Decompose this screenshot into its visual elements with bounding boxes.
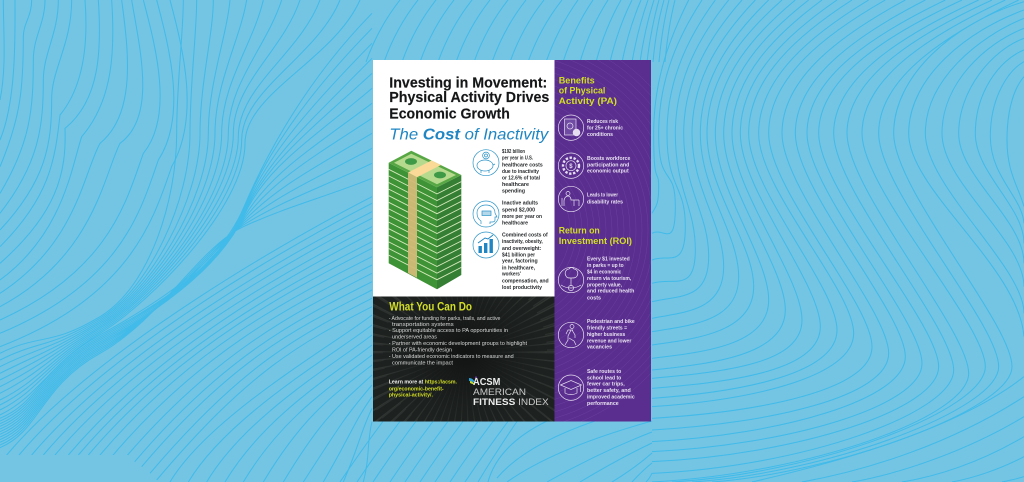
stat: healthcare cost bbox=[473, 149, 543, 195]
text: inactive adults bbox=[502, 201, 543, 226]
logo: ACSM American Fitness Index: AMERICAN bbox=[473, 387, 526, 398]
heading: return on investment bbox=[559, 225, 632, 247]
action list: transportation systems bbox=[392, 322, 454, 328]
heading: benefits of physical activity: Benefits bbox=[559, 75, 595, 86]
text: parks: $4 in economic bbox=[587, 269, 621, 275]
text: safe routes: improved academic bbox=[587, 395, 635, 401]
roi: safe routes bbox=[558, 369, 635, 407]
title: Investing in Movement: bbox=[389, 75, 547, 91]
icon: pedestrian bbox=[558, 322, 584, 348]
learn more link bbox=[389, 379, 457, 399]
text: streets bbox=[587, 319, 635, 351]
icon: medical report bbox=[558, 115, 584, 140]
heading: benefits of physical activity bbox=[559, 75, 617, 107]
icon: person at desk bbox=[558, 186, 584, 212]
text: safe routes: performance bbox=[587, 401, 619, 407]
text: combined costs: inactivity, obesity, bbox=[502, 239, 543, 245]
text: parks: return via tourism, bbox=[587, 276, 632, 282]
text: lower disability: disability rates bbox=[587, 199, 623, 205]
text: healthcare cost: $192 billion bbox=[502, 149, 525, 155]
text: reduces risk: conditions bbox=[587, 132, 613, 138]
benefit: reduces risk bbox=[558, 115, 623, 140]
action list bbox=[389, 316, 527, 366]
text: safe routes: school lead to bbox=[587, 375, 622, 381]
text: reduces risk bbox=[587, 119, 623, 138]
text: combined costs: $41 billion per bbox=[502, 252, 536, 258]
text: combined costs bbox=[501, 233, 549, 291]
text: streets: vacancies bbox=[587, 345, 612, 351]
benefit: workforce participation bbox=[558, 153, 630, 178]
text: streets: Pedestrian and bike bbox=[587, 319, 635, 325]
learn more link: org/economic-benefit- bbox=[389, 386, 444, 392]
action list: - Partner with economic development groups to highlight bbox=[389, 341, 527, 347]
text: streets: friendly streets = bbox=[587, 325, 628, 331]
stat: combined costs bbox=[473, 232, 549, 291]
text: reduces risk: Reduces risk bbox=[587, 119, 619, 125]
text: healthcare cost: due to inactivity bbox=[502, 169, 540, 175]
stat: inactive adults bbox=[473, 201, 543, 227]
text: reduces risk: for 25+ chronic bbox=[587, 126, 623, 132]
text: combined costs: compensation, and bbox=[502, 278, 549, 284]
icon: gear with dollar: $ bbox=[569, 164, 573, 170]
panel: the cost of inactivity (white) bbox=[373, 60, 554, 296]
text: streets: revenue and lower bbox=[587, 338, 632, 344]
text: streets: higher business bbox=[587, 332, 625, 338]
text: healthcare cost bbox=[502, 149, 543, 195]
text: parks bbox=[587, 257, 635, 301]
logo: ACSM American Fitness Index: ACSM bbox=[473, 377, 500, 388]
text: workforce participation: economic output bbox=[587, 169, 629, 175]
text: inactive adults: healthcare bbox=[502, 220, 528, 226]
text: healthcare cost: or 12.6% of total bbox=[502, 176, 540, 182]
text: lower disability: Leads to lower bbox=[587, 193, 619, 199]
text: combined costs: in healthcare, bbox=[502, 265, 535, 271]
text: healthcare cost: healthcare bbox=[502, 182, 529, 188]
text: lower disability bbox=[587, 193, 623, 205]
logo: ACSM American Fitness Index bbox=[469, 376, 549, 408]
roi: parks bbox=[558, 257, 635, 301]
logo: ACSM American Fitness Index: FITNESS INDEX bbox=[473, 397, 549, 408]
action list: ROI of PA-friendly design bbox=[392, 347, 452, 353]
text: parks: in parks = up to bbox=[587, 263, 624, 269]
panel: what you can do (black) bbox=[373, 296, 554, 422]
title: Physical Activity Drives bbox=[389, 90, 549, 106]
learn more link: physical-activity/. bbox=[389, 393, 433, 399]
strips above and below the poster bbox=[340, 0, 675, 482]
icon: rising bar chart bbox=[473, 232, 499, 258]
text: combined costs: lost productivity bbox=[502, 285, 543, 291]
text: parks: property value, bbox=[587, 282, 622, 288]
icon: head with battery bbox=[473, 201, 499, 227]
action list: - Use validated economic indicators to measure and bbox=[389, 354, 514, 360]
title: Economic Growth bbox=[389, 106, 510, 122]
panel: benefits and return on investment (purple) bbox=[554, 60, 651, 422]
title bbox=[389, 75, 549, 122]
icon: piggy bank bbox=[473, 150, 499, 176]
text: safe routes: better safety, and bbox=[587, 388, 631, 394]
text: workforce participation: participation and bbox=[587, 162, 630, 168]
action list: - Advocate for funding for parks, trails, and active bbox=[389, 316, 500, 322]
text: inactive adults: spend $2,000 bbox=[502, 207, 535, 213]
action list: underserved areas bbox=[392, 335, 437, 341]
action list: communicate the impact bbox=[392, 360, 453, 366]
text: combined costs: workers' bbox=[501, 272, 522, 278]
text: inactive adults: more per year on bbox=[502, 214, 543, 220]
heading: return on investment: Investment (ROI) bbox=[559, 236, 632, 247]
text: combined costs: year, factoring bbox=[502, 259, 538, 265]
heading: what you can do: What You Can Do bbox=[389, 300, 472, 313]
text: safe routes: fewer car trips, bbox=[587, 382, 625, 388]
text: healthcare cost: per year in U.S. bbox=[502, 156, 533, 162]
text: workforce participation bbox=[587, 156, 630, 175]
text: healthcare cost: spending bbox=[502, 189, 526, 195]
text: safe routes: Safe routes to bbox=[587, 369, 622, 375]
text: combined costs: and overweight: bbox=[502, 246, 541, 252]
icon: graduation cap bbox=[558, 375, 584, 400]
learn more link: Learn more at https://acsm. bbox=[389, 379, 457, 385]
text: inactive adults: Inactive adults bbox=[502, 201, 538, 207]
text: parks: Every $1 invested bbox=[587, 257, 630, 263]
action list: - Support equitable access to PA opportunities in bbox=[389, 328, 508, 334]
text: parks: costs bbox=[587, 295, 601, 301]
subtitle: the cost of inactivity: The Cost of Inactivity bbox=[389, 126, 549, 144]
benefit: lower disability bbox=[558, 186, 623, 212]
heading: return on investment: Return on bbox=[559, 225, 600, 236]
icon: tree with coin bbox=[558, 267, 584, 293]
roi: streets bbox=[558, 319, 635, 351]
text: workforce participation: Boosts workforce bbox=[587, 156, 630, 162]
text: safe routes bbox=[587, 369, 635, 407]
heading: benefits of physical activity: Activity (PA) bbox=[559, 96, 617, 107]
text: combined costs: Combined costs of bbox=[502, 233, 548, 239]
heading: benefits of physical activity: of Physical bbox=[559, 86, 605, 96]
illustration: stack of money bbox=[389, 151, 461, 289]
text: healthcare cost: healthcare costs bbox=[502, 162, 543, 168]
text: parks: and reduced health bbox=[587, 289, 635, 295]
